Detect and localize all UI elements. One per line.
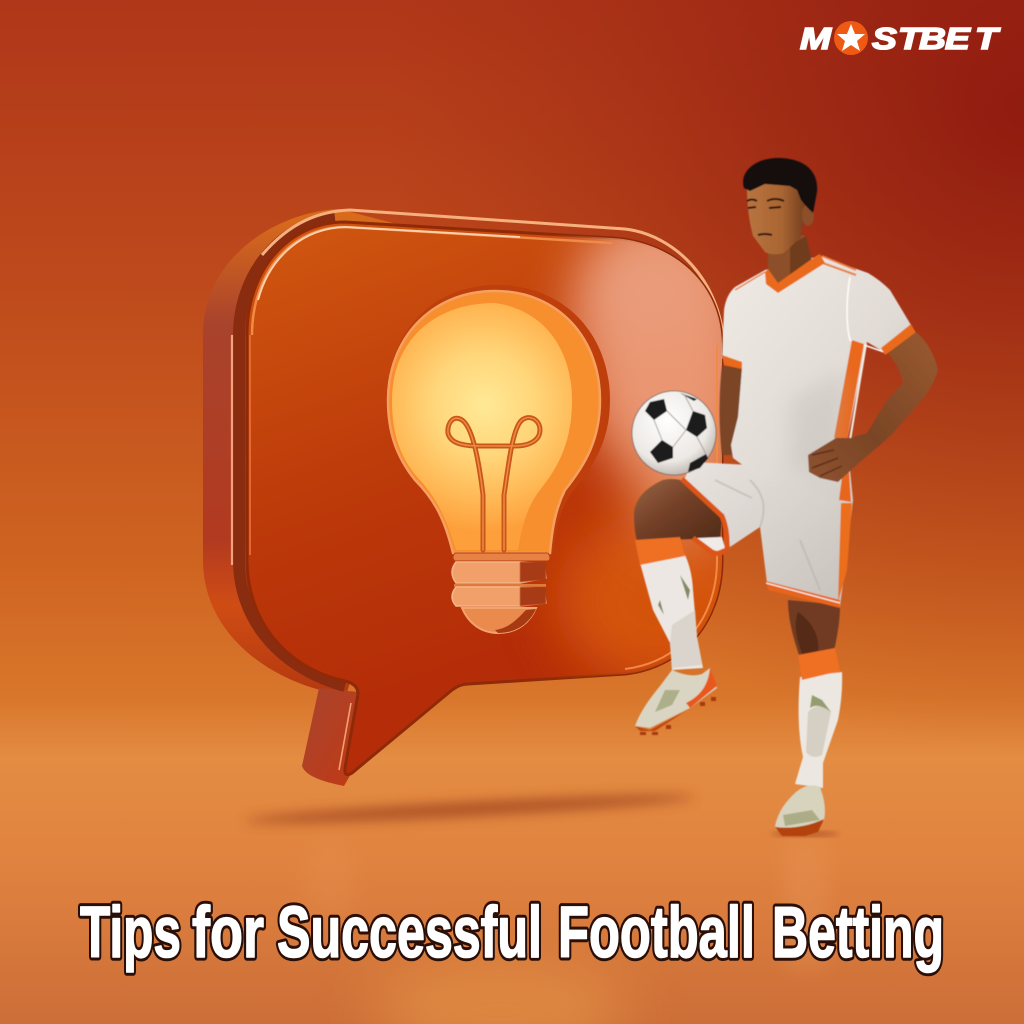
standing leg: [771, 600, 842, 837]
raised sock: [640, 555, 703, 670]
near arm and hand: [808, 332, 938, 482]
shirt: [722, 256, 916, 502]
title: [80, 893, 944, 973]
standing thigh and calf: [788, 600, 840, 658]
boot studs: [640, 697, 716, 735]
speech bubble with light bulb: [203, 209, 775, 786]
standing leg shadow on floor: [771, 831, 839, 837]
shirt side stripe: [834, 340, 864, 440]
hair: [743, 158, 817, 213]
bulb glowing core: [392, 303, 572, 550]
bubble back rim: [262, 210, 724, 345]
title: Betting: [772, 893, 944, 973]
raised sock band: [635, 537, 685, 565]
title: Successful: [277, 893, 542, 973]
head: [743, 158, 817, 254]
logo: Mostbet: M: [800, 22, 833, 56]
title: Tips: [80, 893, 181, 973]
soccer ball: [632, 391, 716, 475]
title: Betting: [772, 893, 944, 973]
shorts: [684, 462, 853, 608]
raised thigh: [634, 479, 722, 541]
glossy reflection and lower tint on bubble: [538, 235, 722, 678]
ear: [802, 204, 814, 226]
title: Successful: [277, 893, 542, 973]
tail side face: [302, 688, 358, 786]
standing sock band: [798, 648, 840, 680]
title: Football: [558, 893, 755, 973]
bubble front face: [247, 222, 722, 775]
neck: [768, 235, 812, 292]
football player: [632, 158, 938, 837]
collar: [765, 254, 825, 293]
title: for: [192, 893, 264, 973]
bulb recess shadow: [387, 285, 610, 553]
bubble side highlight: [231, 335, 233, 565]
title: Tips: [80, 893, 181, 973]
logo: Mostbet: STBET: [872, 22, 1001, 56]
filament: [448, 418, 540, 550]
eyes, brows, nose and mouth: [747, 199, 784, 235]
shorts hem trim: [766, 581, 840, 608]
standing boot: [775, 785, 825, 830]
floor shadow of speech bubble: [245, 790, 695, 828]
bubble groove between side and face: [239, 218, 345, 686]
raised boot: [635, 668, 717, 735]
bulb screw base: [452, 553, 550, 633]
logo: Mostbet: [800, 21, 1001, 56]
bubble inner rim highlight: [252, 227, 612, 335]
bubble extruded side: [203, 209, 400, 700]
fingers: [812, 450, 842, 476]
title: Football: [558, 893, 755, 973]
right sleeve seam: [847, 277, 884, 352]
face: [747, 175, 805, 254]
shorts folds: [715, 480, 820, 590]
shirt shading: [790, 370, 845, 470]
sleeve cuffs: [722, 355, 742, 369]
shorts raised leg trim: [697, 537, 725, 552]
light bulb: [387, 285, 610, 633]
lower shirt side: [839, 470, 851, 502]
standing sock: [795, 672, 842, 788]
shorts side stripe: [838, 503, 852, 602]
title: for: [192, 893, 264, 973]
bulb glass: [388, 291, 600, 553]
logo star icon: [834, 21, 868, 55]
far arm: [720, 366, 742, 455]
shirt shoulder stripes: [820, 256, 856, 275]
